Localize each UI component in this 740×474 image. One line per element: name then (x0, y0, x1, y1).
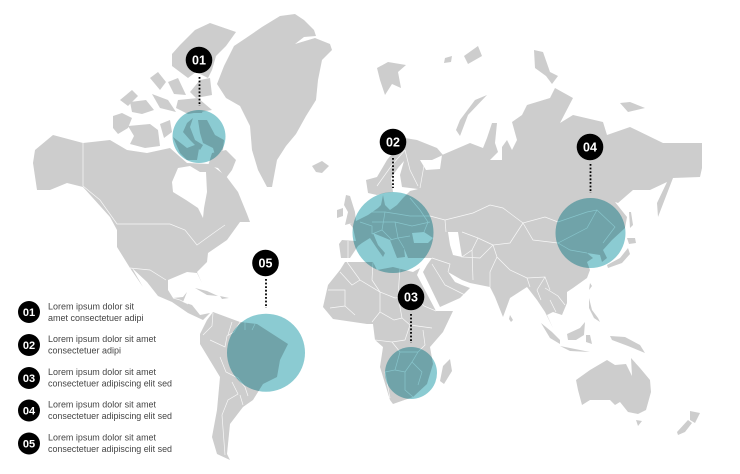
legend item 03: consectetuer adipiscing elit sed (48, 378, 172, 390)
pin 01 (186, 47, 212, 106)
legend item 02: consectetuer adipi (48, 346, 121, 356)
legend item 03 (18, 367, 172, 390)
pin 02: 02 (386, 136, 400, 150)
legend item 02 (18, 334, 156, 356)
legend item 03: 03 (23, 373, 35, 385)
country borders (83, 143, 615, 455)
Madagascar (440, 359, 452, 384)
Hudson Bay (172, 166, 207, 218)
Japan and Sakhalin (607, 212, 636, 268)
highlight circle 04 (556, 198, 626, 268)
legend item 04: 04 (23, 406, 36, 418)
New Zealand (690, 411, 700, 423)
legend item 03: Lorem ipsum dolor sit amet (48, 367, 156, 378)
legend item 01: Lorem ipsum dolor sit (48, 302, 134, 312)
legend item 01: 01 (23, 307, 35, 319)
pin 02 (380, 129, 406, 188)
pin 05 (252, 250, 279, 308)
highlight circle 05 (227, 314, 305, 392)
legend item 01 (18, 301, 144, 324)
pin 04: 04 (583, 140, 597, 154)
legend item 05 (18, 432, 172, 455)
Eurasia (339, 88, 702, 328)
pin 01: 01 (192, 54, 206, 68)
South America (200, 312, 288, 460)
pin 03 (398, 284, 424, 343)
legend item 01: amet consectetuer adipi (48, 313, 144, 324)
pin 04 (577, 134, 603, 193)
North America (33, 135, 250, 320)
Australia (576, 358, 651, 414)
legend item 05: Lorem ipsum dolor sit amet (48, 432, 156, 444)
legend item 02: Lorem ipsum dolor sit amet (48, 334, 156, 345)
Greenland (217, 14, 332, 187)
legend item 04: consectetuer adipiscing elit sed (48, 411, 172, 422)
highlight circle 01 (172, 110, 226, 163)
Sri Lanka and Taiwan (509, 315, 513, 322)
legend item 02: 02 (23, 340, 35, 352)
Baffin crescent and northern islands under circle 01 (173, 110, 236, 178)
Inland seas (412, 232, 462, 257)
highlight circle 02 (352, 192, 434, 273)
Svalbard, Franz Josef, Novaya Zemlya and Arctic islands (377, 62, 406, 95)
legend item 04: Lorem ipsum dolor sit amet (48, 400, 156, 410)
legend item 05: 05 (23, 438, 35, 450)
Cuba and Caribbean (195, 288, 218, 296)
Philippines (589, 298, 600, 322)
Africa (323, 262, 453, 404)
pin 05: 05 (259, 256, 272, 270)
Iceland and British Isles (312, 161, 329, 173)
pin 03: 03 (404, 290, 418, 304)
legend (18, 301, 172, 455)
legend item 05: consectetuer adipiscing elit sed (48, 444, 172, 455)
Canadian Arctic islands (113, 23, 236, 148)
highlight circle 03 (385, 347, 437, 399)
legend item 04 (18, 400, 172, 422)
Indonesia and New Guinea (541, 323, 560, 344)
